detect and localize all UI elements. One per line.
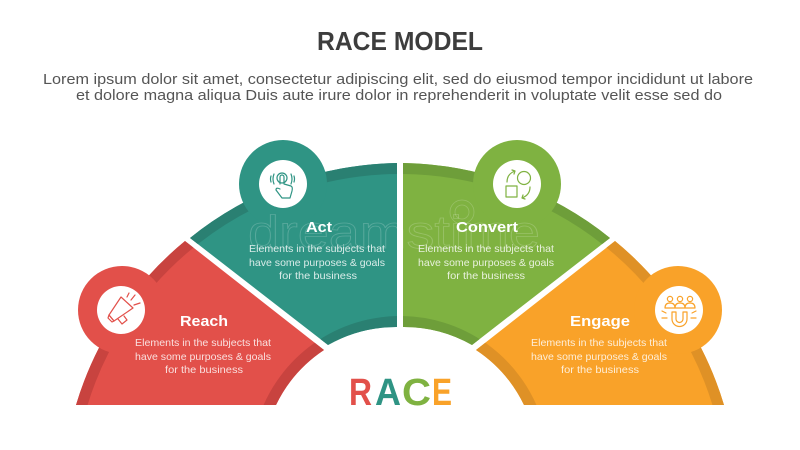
act heading: Act <box>306 219 332 236</box>
center word: RACE <box>349 372 452 414</box>
engage body text: for the business <box>561 364 639 376</box>
engage heading: Engage <box>570 313 630 330</box>
center word: RACE: C <box>402 372 431 414</box>
stock watermark: dreamstime <box>248 206 540 258</box>
engage body text: Elements in the subjects that <box>531 337 667 349</box>
subtitle text <box>43 71 753 104</box>
center word: RACE: A <box>375 372 401 414</box>
convert icon badge <box>473 140 561 228</box>
reach sector <box>76 241 324 405</box>
reach heading: Reach <box>180 313 228 330</box>
act sector <box>190 163 397 345</box>
subtitle text: Lorem ipsum dolor sit amet, consectetur adipiscing elit, sed do eiusmod tempor incididunt ut labore <box>43 71 753 88</box>
engage sector <box>476 241 724 405</box>
act body text <box>249 243 385 282</box>
engage icon badge <box>634 266 722 354</box>
reach icon badge <box>78 266 166 354</box>
act body text: have some purposes & goals <box>249 257 385 269</box>
act icon badge <box>239 140 327 228</box>
title: RACE MODEL <box>317 26 483 56</box>
act icon: tapping hand <box>259 160 307 208</box>
convert icon: shapes and arrows <box>493 160 541 208</box>
panel: engage <box>476 241 724 405</box>
reach body text: have some purposes & goals <box>135 351 271 363</box>
panel: act <box>190 140 397 345</box>
reach body text <box>135 337 271 376</box>
convert sector <box>403 163 610 345</box>
panel: convert <box>403 140 610 345</box>
subtitle text: et dolore magna aliqua Duis aute irure dolor in reprehenderit in voluptate velit esse sed do <box>76 87 722 104</box>
center word: RACE: R <box>349 372 372 414</box>
act body text: Elements in the subjects that <box>249 243 385 255</box>
convert body text <box>418 243 554 282</box>
panel: reach <box>76 241 324 405</box>
convert body text: Elements in the subjects that <box>418 243 554 255</box>
act body text: for the business <box>279 270 357 282</box>
center word: RACE: E <box>432 372 452 414</box>
reach icon: megaphone <box>97 286 145 334</box>
reach body text: for the business <box>165 364 243 376</box>
convert body text: for the business <box>447 270 525 282</box>
engage body text <box>531 337 667 376</box>
convert body text: have some purposes & goals <box>418 257 554 269</box>
engage icon: magnet and people <box>655 286 703 334</box>
reach body text: Elements in the subjects that <box>135 337 271 349</box>
engage body text: have some purposes & goals <box>531 351 667 363</box>
convert heading: Convert <box>456 219 518 236</box>
